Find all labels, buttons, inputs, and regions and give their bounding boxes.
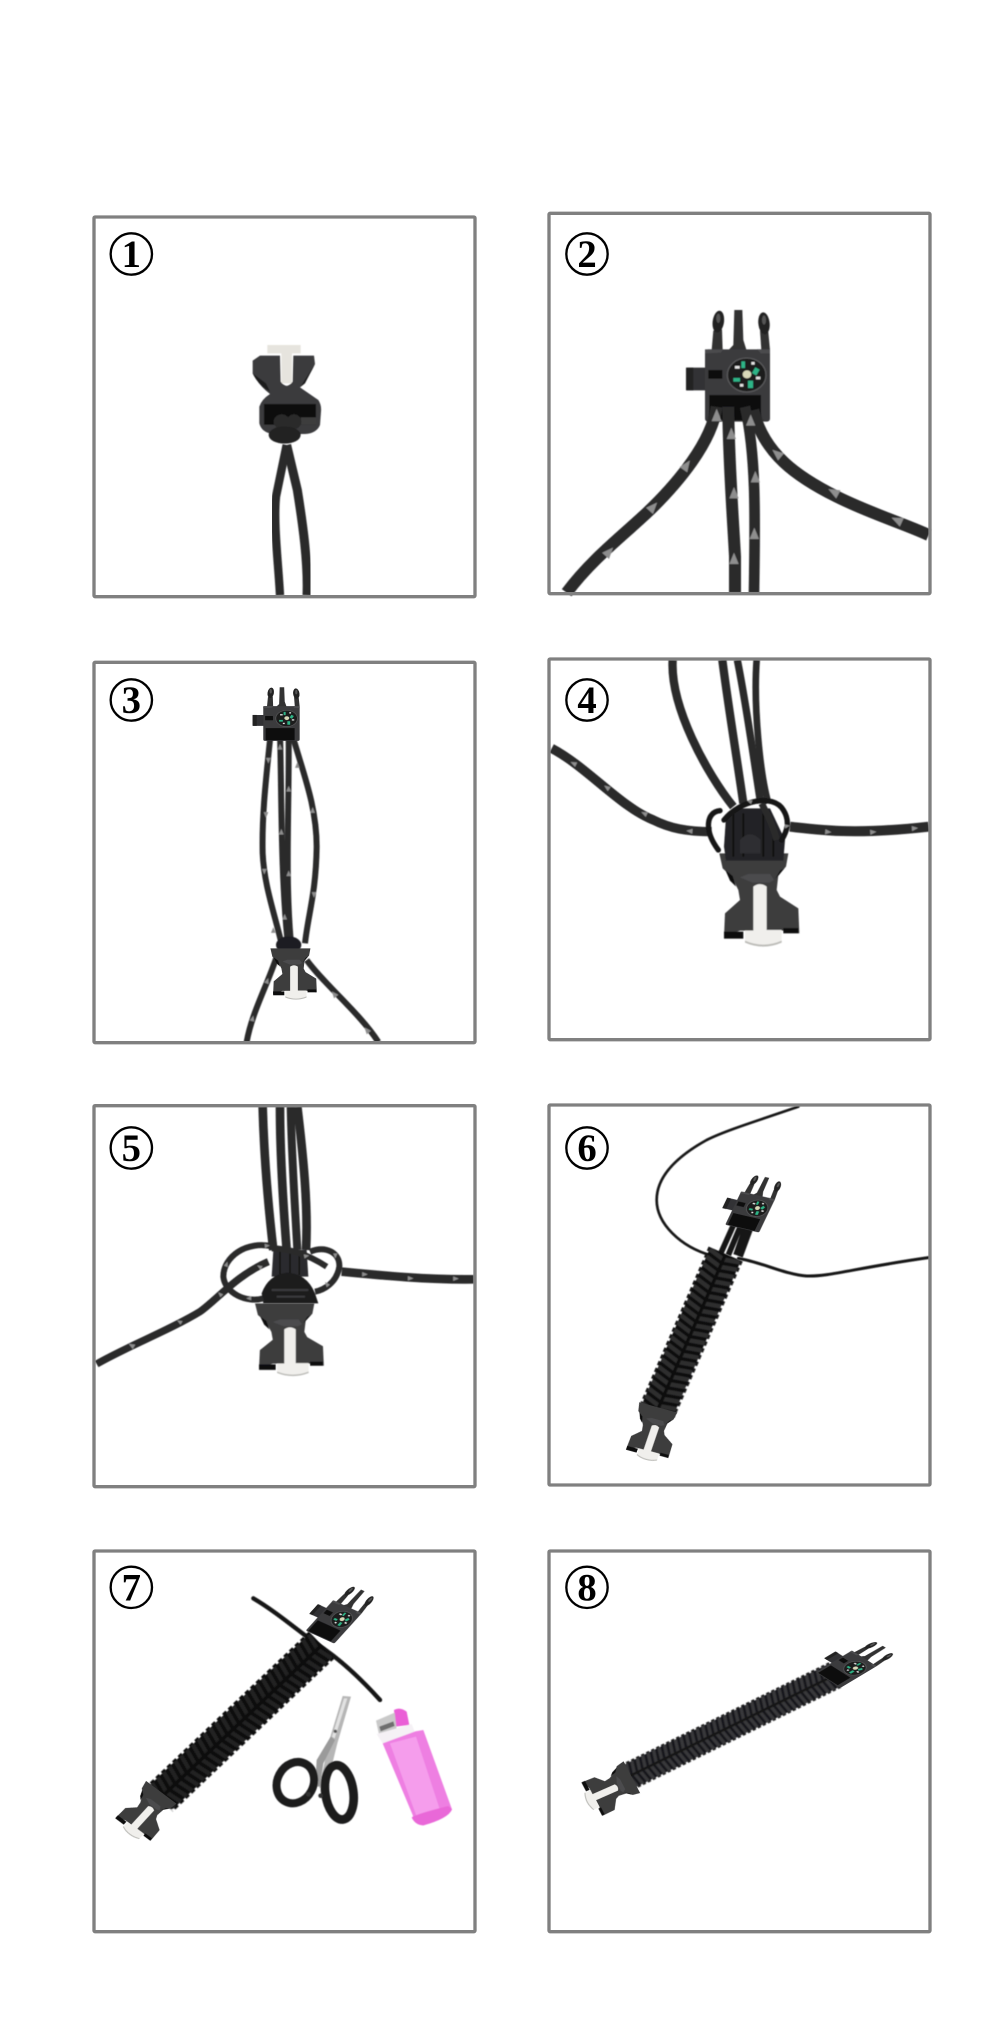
thin inner strand: step 6 — [657, 1107, 928, 1276]
frame: step 5 — [94, 1106, 475, 1487]
bottom buckle: step 4 — [719, 853, 799, 947]
badge: step 6: 6 — [577, 1128, 597, 1170]
bottom buckle: step 5 — [255, 1303, 324, 1376]
badge: step 8: 8 — [577, 1567, 597, 1609]
bottom buckle: step 3 — [270, 948, 317, 1000]
panel: step 3 — [94, 662, 475, 1043]
frame: step 4 — [549, 659, 930, 1040]
top buckle: step 3 — [253, 687, 300, 741]
bottom buckle: step 6 — [622, 1402, 683, 1465]
top buckle: step 6 — [715, 1171, 784, 1233]
top buckle: step 7 — [297, 1580, 377, 1644]
buckle: step 1 — [253, 345, 321, 444]
cords under buckle: step 6 — [720, 1222, 752, 1257]
frame: step 7 — [94, 1551, 475, 1932]
panel: step 4 — [549, 659, 930, 1040]
cords and second knot: step 5 — [97, 1107, 474, 1364]
frame: step 2 — [549, 213, 930, 594]
badge: step 4: 4 — [577, 680, 597, 722]
panel: step 6 — [549, 1105, 930, 1485]
frame: step 3 — [94, 662, 475, 1043]
cords: step 3 — [247, 733, 378, 1042]
panel: step 7 — [94, 1551, 475, 1932]
finished braided band: step 8 — [621, 1664, 841, 1789]
cords: step 1 — [275, 445, 307, 595]
badge: step 6 — [566, 1127, 608, 1170]
braided band: step 7 — [149, 1633, 333, 1810]
icon: scissors — [269, 1696, 357, 1821]
panel: step 8 — [549, 1551, 930, 1932]
icon: pink lighter — [376, 1709, 452, 1825]
trimmed strand: step 7 — [253, 1598, 380, 1700]
frame: step 8 — [549, 1551, 930, 1932]
badge: step 2: 2 — [577, 234, 597, 276]
badge: step 5: 5 — [122, 1128, 141, 1170]
frame: step 6 — [549, 1105, 930, 1485]
cords and first knot: step 4 — [552, 660, 929, 861]
badge: step 4 — [566, 679, 608, 722]
panel: step 2 — [549, 213, 930, 594]
badge: step 1 — [111, 233, 152, 276]
braided band: step 6 — [642, 1247, 741, 1417]
buckle with compass: step 2 — [686, 310, 771, 422]
badge: step 7: 7 — [122, 1567, 141, 1609]
badge: step 7 — [111, 1567, 152, 1609]
bottom buckle: step 7 — [110, 1781, 181, 1847]
frame: step 1 — [94, 217, 475, 597]
badge: step 2 — [566, 233, 608, 276]
badge: step 3 — [111, 679, 152, 722]
panel: step 5 — [94, 1106, 475, 1487]
cords with reflective arrows: step 2 — [567, 407, 929, 593]
top buckle: step 8 — [809, 1634, 897, 1688]
panel: step 1 — [94, 217, 475, 597]
bottom buckle: step 8 — [576, 1761, 643, 1819]
badge: step 3: 3 — [122, 680, 141, 722]
badge: step 1: 1 — [122, 234, 141, 276]
badge: step 8 — [566, 1567, 608, 1609]
badge: step 5 — [111, 1127, 152, 1170]
